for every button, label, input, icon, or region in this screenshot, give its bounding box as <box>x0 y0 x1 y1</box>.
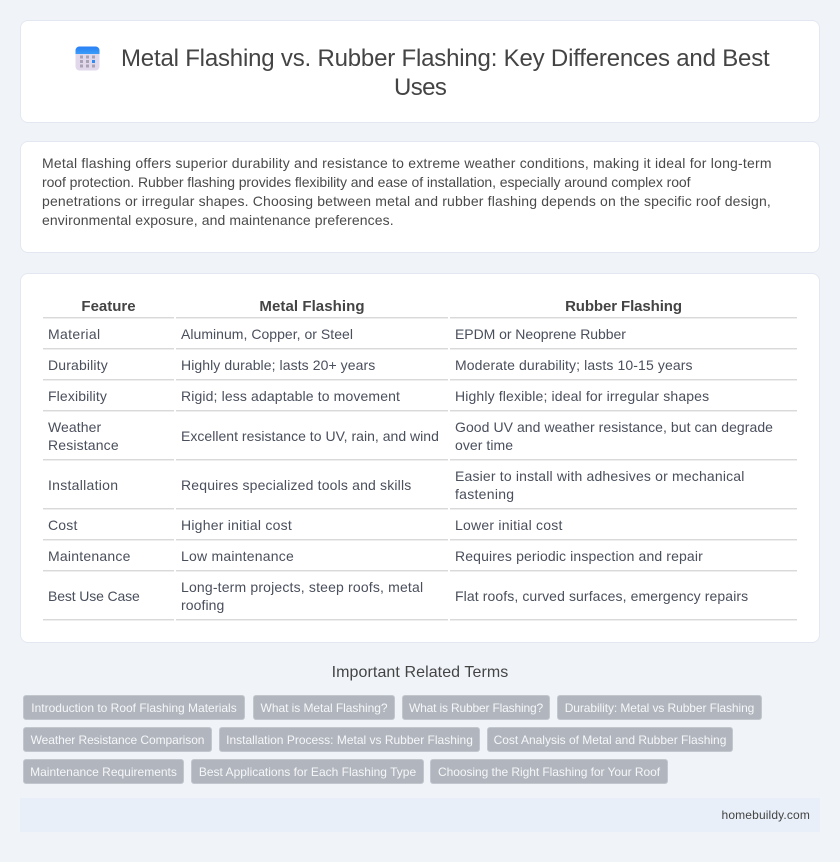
title: Metal Flashing vs. Rubber Flashing: Key Differences and Best <box>121 45 769 72</box>
intro card: Metal flashing offers superior durability and resistance to extreme weather conditions, making it ideal for long-term <box>42 155 772 171</box>
related terms heading: Important Related Terms <box>332 664 508 681</box>
comparison table: over time <box>455 437 513 453</box>
comparison table: Durability <box>48 357 108 373</box>
comparison table <box>43 298 797 621</box>
table header: Metal Flashing <box>259 298 365 315</box>
related terms tags: Durability: Metal vs Rubber Flashing <box>565 701 754 715</box>
comparison table: Long-term projects, steep roofs, metal <box>181 579 423 595</box>
intro card: environmental exposure, and maintenance preferences. <box>42 212 394 228</box>
related terms tags: Choosing the Right Flashing for Your Roof <box>438 765 660 779</box>
comparison table: Easier to install with adhesives or mechanical <box>455 468 745 484</box>
related terms tags: What is Metal Flashing? <box>261 701 387 715</box>
comparison table: Material <box>48 326 100 342</box>
related terms tags: Best Applications for Each Flashing Type <box>199 765 416 779</box>
footer bar <box>20 798 820 832</box>
comparison table: Requires periodic inspection and repair <box>455 548 703 564</box>
comparison table: Maintenance <box>48 548 131 564</box>
icon: calendar <box>76 46 100 70</box>
comparison table: Low maintenance <box>181 548 294 564</box>
related terms tags: Maintenance Requirements <box>30 765 177 779</box>
intro card: roof protection. Rubber flashing provides flexibility and ease of installation, especially around complex roof <box>42 174 690 190</box>
comparison table: Requires specialized tools and skills <box>181 477 411 493</box>
table header: Feature <box>81 298 136 315</box>
comparison table: fastening <box>455 486 514 502</box>
comparison table: roofing <box>181 597 224 613</box>
table header <box>81 298 682 315</box>
comparison table: Weather <box>48 419 101 435</box>
title: Uses <box>394 74 446 101</box>
comparison table: Highly flexible; ideal for irregular shapes <box>455 388 709 404</box>
comparison table: Aluminum, Copper, or Steel <box>181 326 353 342</box>
intro card <box>20 141 820 253</box>
comparison table: Highly durable; lasts 20+ years <box>181 357 375 373</box>
comparison table: Installation <box>48 477 118 493</box>
related terms tags: Installation Process: Metal vs Rubber Flashing <box>226 733 473 747</box>
comparison table: EPDM or Neoprene Rubber <box>455 326 626 342</box>
comparison table: Rigid; less adaptable to movement <box>181 388 400 404</box>
comparison table: Resistance <box>48 437 119 453</box>
related terms tags: Introduction to Roof Flashing Materials <box>31 701 237 715</box>
intro text <box>42 155 772 228</box>
footer source: homebuildy.com <box>722 808 810 822</box>
comparison table: Higher initial cost <box>181 517 292 533</box>
comparison table: Excellent resistance to UV, rain, and wind <box>181 428 439 444</box>
related terms tags: What is Rubber Flashing? <box>409 701 543 715</box>
related terms tags: Weather Resistance Comparison <box>31 733 204 747</box>
table header: Rubber Flashing <box>565 298 682 315</box>
comparison table: Cost <box>48 517 78 533</box>
comparison table: Best Use Case <box>48 588 140 604</box>
comparison table: Moderate durability; lasts 10-15 years <box>455 357 693 373</box>
header card <box>20 20 820 123</box>
comparison table: Flat roofs, curved surfaces, emergency repairs <box>455 588 748 604</box>
title <box>121 45 770 101</box>
comparison table: Good UV and weather resistance, but can degrade <box>455 419 773 435</box>
related terms tags: Cost Analysis of Metal and Rubber Flashing <box>494 733 726 747</box>
comparison table card <box>20 273 820 643</box>
intro card: penetrations or irregular shapes. Choosing between metal and rubber flashing depends on the specific roof design, <box>42 193 771 209</box>
related terms tags <box>23 695 762 784</box>
comparison table: Lower initial cost <box>455 517 563 533</box>
comparison table: Flexibility <box>48 388 107 404</box>
